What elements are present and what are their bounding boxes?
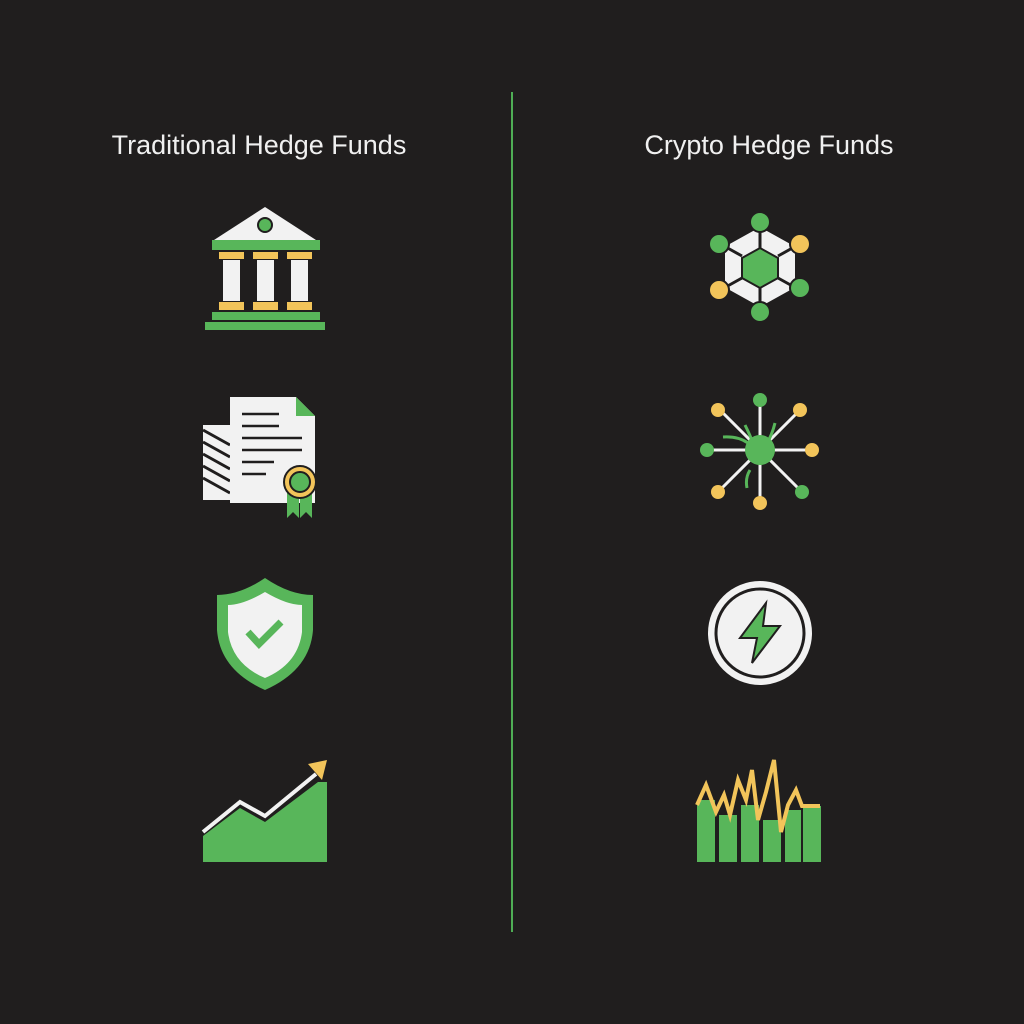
icon: growth chart [203, 760, 327, 862]
icon: bank [205, 207, 325, 330]
icon: lightning coin [708, 581, 812, 685]
icon: documents with seal [203, 397, 316, 518]
title: crypto: Crypto Hedge Funds [644, 130, 894, 160]
title: traditional: Traditional Hedge Funds [112, 130, 406, 160]
icon: network star [700, 393, 819, 510]
icon: shield check [217, 578, 313, 690]
icon: hex network [709, 212, 810, 322]
divider [511, 92, 513, 932]
icon: volatility chart [697, 760, 821, 862]
